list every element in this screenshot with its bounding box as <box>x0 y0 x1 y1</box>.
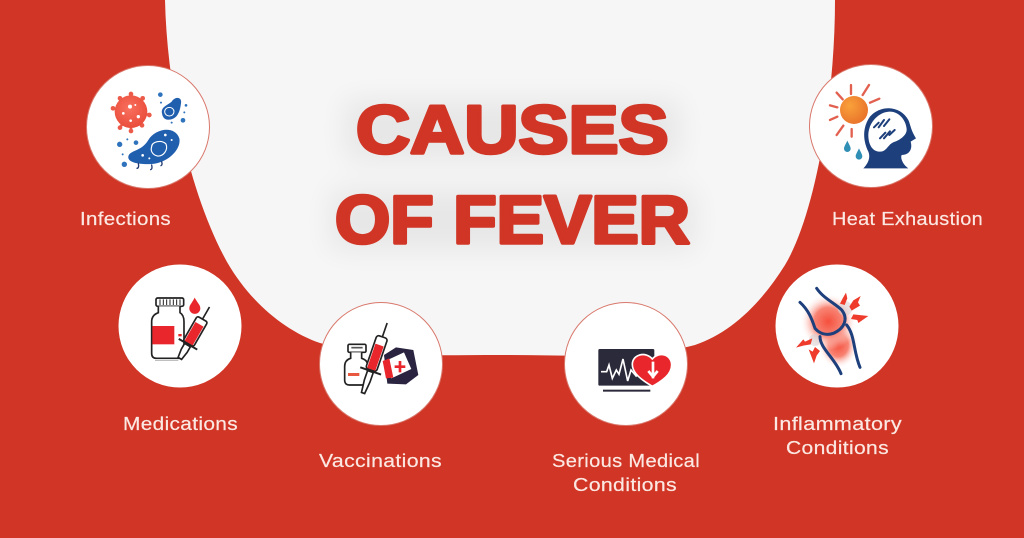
icon circle: serious medical conditions <box>564 302 688 426</box>
item: inflammatory conditions <box>773 264 902 458</box>
label: inflammatory conditions: Inflammatory <box>773 414 902 434</box>
icon circle: medications <box>118 264 242 388</box>
icon: heart monitor <box>598 349 672 392</box>
label: heat exhaustion: Heat Exhaustion <box>832 209 983 229</box>
icon circle: heat exhaustion <box>810 64 932 188</box>
icon circle: inflammatory conditions <box>776 264 898 388</box>
label: serious medical conditions: Serious Medical <box>552 451 700 471</box>
title: OF FEVER <box>335 181 690 258</box>
label: infections: Infections <box>80 209 171 229</box>
label: inflammatory conditions <box>773 414 902 458</box>
title: CAUSES <box>356 92 669 168</box>
icon: vial, syringe and kit <box>345 319 418 397</box>
label: serious medical conditions <box>552 451 700 495</box>
title <box>330 92 695 258</box>
item: heat exhaustion <box>810 64 983 229</box>
item: vaccinations <box>319 302 442 471</box>
label: inflammatory conditions: Conditions <box>786 438 889 458</box>
item: infections <box>80 66 210 229</box>
label: vaccinations: Vaccinations <box>319 451 442 471</box>
icon: inflamed joint <box>796 288 868 374</box>
icon circle: vaccinations <box>320 302 442 426</box>
item: medications <box>118 264 242 434</box>
icon circle: infections <box>86 66 210 188</box>
icon: virus and bacteria <box>111 92 187 170</box>
icon: bottle and syringe <box>152 298 219 364</box>
icon: sun and head <box>830 85 916 168</box>
white central panel <box>165 0 835 356</box>
item: serious medical conditions <box>552 302 700 495</box>
label: medications: Medications <box>123 414 238 434</box>
label: serious medical conditions: Conditions <box>573 475 677 495</box>
